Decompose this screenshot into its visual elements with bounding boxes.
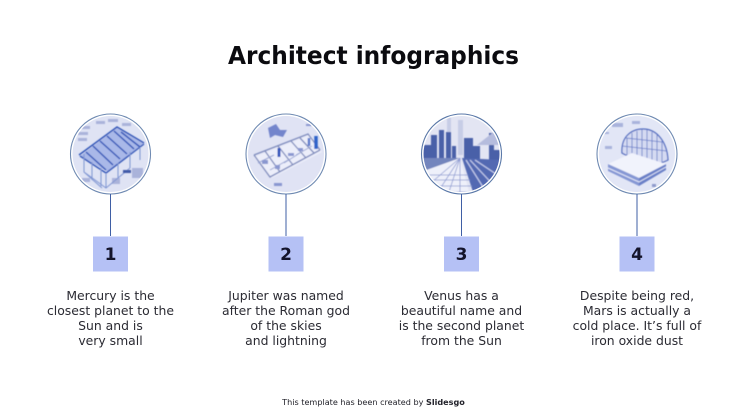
number box 4: 4: [631, 245, 643, 265]
text: mars: Despite being red,: [580, 288, 694, 303]
text: mercury: very small: [78, 333, 143, 348]
text: mercury: Mercury is the: [66, 288, 155, 303]
number box 1: 1: [105, 245, 116, 265]
connector line: [636, 194, 638, 236]
text: jupiter: of the skies: [250, 318, 322, 333]
connector line: [460, 194, 462, 236]
number box 2: [268, 236, 304, 272]
text: mercury: Sun and is: [78, 318, 143, 333]
connector line: [110, 194, 112, 236]
number box 4: [620, 236, 654, 272]
number box 3: 3: [456, 245, 467, 265]
step 3: city perspective: [399, 114, 524, 348]
icon: roof framing blueprint: [70, 114, 151, 195]
step 1: roof framing: [47, 114, 174, 348]
number box 2: 2: [280, 245, 292, 265]
icon: city street perspective: [421, 114, 502, 195]
icon: dome on platform: [597, 114, 678, 195]
text: jupiter: Jupiter was named: [227, 288, 344, 303]
text: venus: Venus has a: [424, 288, 499, 303]
icon: isometric floor plan: [246, 114, 327, 195]
step 2: floor plan: [222, 114, 350, 348]
text: venus: from the Sun: [421, 333, 502, 348]
text: jupiter: after the Roman god: [222, 303, 350, 318]
text: mercury: closest planet to the: [47, 303, 174, 318]
text: jupiter: and lightning: [245, 333, 327, 348]
number box 3: [444, 236, 479, 272]
text: mars: Mars is actually a: [583, 303, 691, 318]
title: Architect infographics: [228, 41, 519, 70]
text: mars: iron oxide dust: [591, 333, 683, 348]
text: mars: cold place. It’s full of: [573, 318, 702, 333]
connector line: [285, 194, 287, 236]
step 4: domed structure: [573, 114, 702, 348]
footer credit: This template has been created by Slidesgo: [281, 397, 465, 407]
text: venus: beautiful name and: [401, 303, 522, 318]
text: venus: is the second planet: [399, 318, 524, 333]
number box 1: [93, 236, 128, 272]
